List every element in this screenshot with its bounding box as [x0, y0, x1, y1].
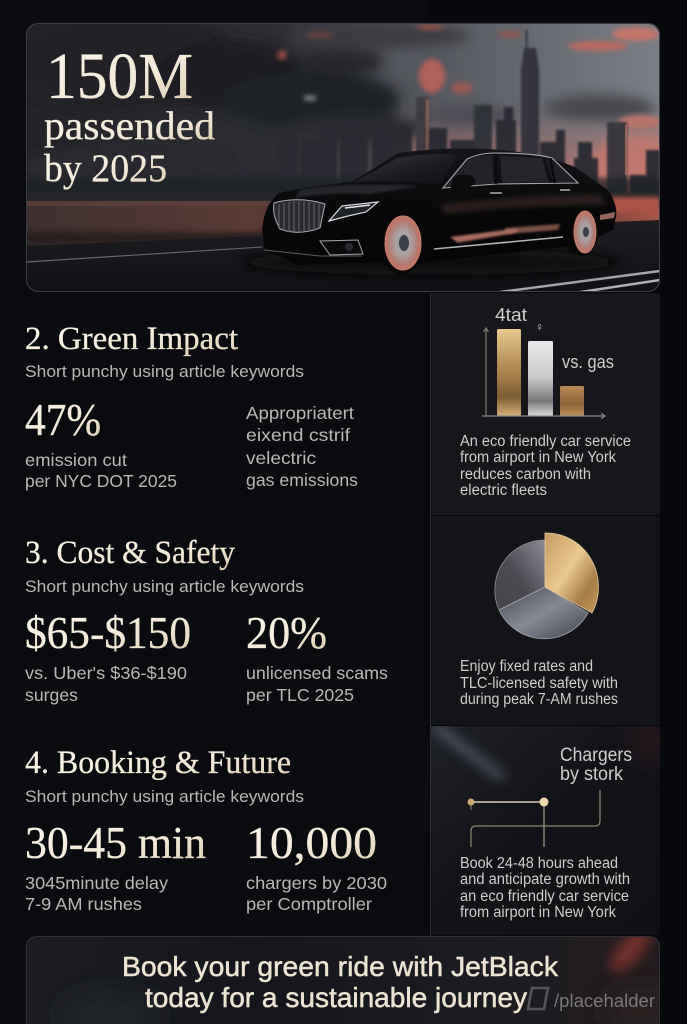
chargers label: by stork [560, 764, 623, 785]
chargers label [560, 745, 632, 785]
stat: delay: 3045minute delay [25, 873, 168, 893]
stat: fare range: vs. Uber's $36-$190 [25, 663, 187, 683]
stat note: eixend cstrif [246, 425, 350, 445]
stat: 47%: 47% [25, 394, 101, 445]
card caption: An eco friendly car service [460, 433, 631, 450]
heading: green impact: 2. Green Impact [25, 321, 238, 357]
card caption [460, 433, 631, 499]
panel: chargers timeline card [431, 726, 660, 935]
clouds [27, 24, 658, 175]
chargers label: Chargers [560, 745, 632, 766]
bar chart: vs. gas [562, 352, 614, 372]
car shadow [240, 249, 620, 275]
subtitle: Short punchy using article keywords [25, 578, 304, 596]
panel: green impact text [25, 321, 358, 491]
card caption: an eco friendly car service [460, 888, 629, 905]
panel: pie chart card [431, 516, 660, 725]
call to action text: today for a sustainable journey [145, 982, 527, 1013]
stat note: Appropriatert [246, 403, 354, 423]
body reflections [440, 194, 606, 214]
grille [274, 200, 325, 232]
stat: chargers [246, 817, 387, 914]
stat: fare range: $65-$150 [25, 607, 191, 658]
card caption [460, 855, 630, 921]
mirror [450, 174, 476, 188]
icon: placeholder mark [528, 988, 548, 1009]
rear wheel [572, 238, 598, 256]
stat: delay: 7-9 AM rushes [25, 894, 142, 914]
card caption: electric fleets [460, 482, 547, 499]
panel: booking and future text [25, 745, 387, 914]
stat: fare range [25, 607, 191, 705]
heading: cost and safety: 3. Cost & Safety [25, 535, 235, 571]
chrome window line [443, 153, 578, 188]
call to action banner [26, 936, 660, 1024]
stat: 47% [25, 394, 177, 491]
column divider [430, 293, 432, 936]
dusk glow [411, 118, 659, 188]
stat: delay [25, 817, 206, 914]
skyline [288, 29, 659, 195]
card caption: during peak 7-AM rushes [460, 691, 618, 708]
heading: booking and future: 4. Booking & Future [25, 745, 291, 781]
hero headline: passended [44, 103, 215, 148]
stat: chargers: per Comptroller [246, 894, 372, 914]
headlight [329, 202, 378, 221]
card caption: Enjoy fixed rates and [460, 658, 593, 675]
card caption: from airport in New York [460, 904, 616, 921]
stat: 47%: emission cut [25, 450, 127, 470]
icon: limousine [262, 148, 616, 274]
stat: chargers: chargers by 2030 [246, 873, 387, 893]
call to action text [122, 951, 559, 1013]
stat note [246, 403, 358, 490]
subtitle: Short punchy using article keywords [25, 363, 304, 381]
bar chart [482, 305, 614, 418]
bar chart: 4tat [495, 305, 527, 325]
stat: delay: 30-45 min [25, 817, 206, 868]
card caption: from airport in New York [460, 449, 616, 466]
hero headline [44, 40, 215, 190]
stat note: velectric [246, 448, 316, 468]
card caption: Book 24-48 hours ahead [460, 855, 618, 872]
card caption: and anticipate growth with [460, 871, 630, 888]
road [26, 220, 660, 292]
card caption: TLC-licensed safety with [460, 675, 618, 692]
stat: 20%: unlicensed scams [246, 663, 388, 683]
call to action text: Book your green ride with JetBlack [122, 951, 559, 982]
timeline diagram [468, 790, 600, 847]
windshield [354, 154, 458, 184]
stat: 20% [246, 607, 388, 705]
panel: bar chart card [431, 293, 660, 515]
pie chart [495, 533, 598, 639]
hero panel with car and skyline [26, 23, 660, 292]
stat note: gas emissions [246, 470, 358, 490]
stat: fare range: surges [25, 685, 78, 705]
stat: 20%: per TLC 2025 [246, 685, 354, 705]
side windows [445, 155, 494, 187]
placeholder label: /placehalder [554, 991, 655, 1011]
barrier [26, 193, 660, 201]
fog lamp [320, 240, 363, 255]
stat: chargers: 10,000 [246, 817, 377, 868]
front wheel [388, 269, 414, 274]
card caption: reduces carbon with [460, 466, 591, 483]
card caption [460, 658, 618, 708]
bar chart: ♀ [535, 320, 544, 334]
hero headline: by 2025 [44, 147, 167, 190]
stat: 20%: 20% [246, 607, 327, 658]
stat: 47%: per NYC DOT 2025 [25, 471, 177, 491]
panel: cost and safety text [25, 535, 388, 705]
hero headline: 150M [46, 40, 193, 113]
subtitle: Short punchy using article keywords [25, 788, 304, 806]
